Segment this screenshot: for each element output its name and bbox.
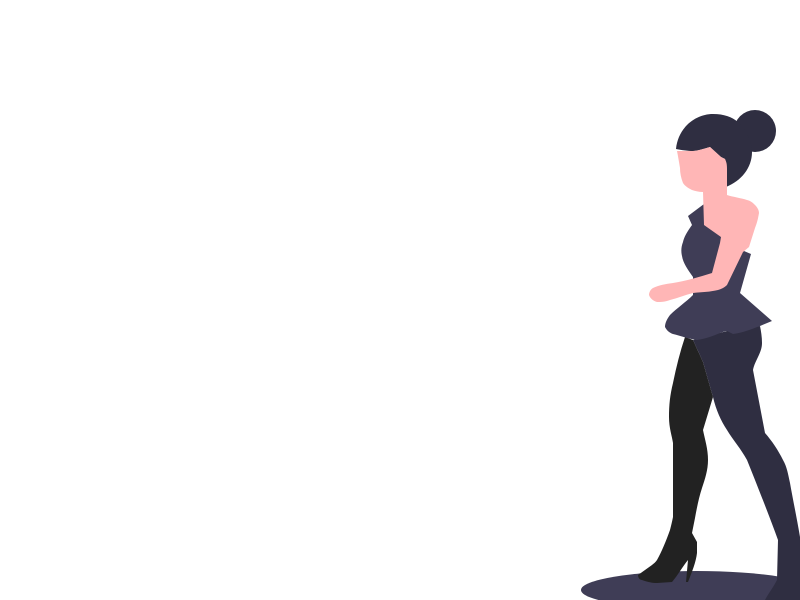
top and peplum: [665, 204, 772, 340]
skin: face, neck and arm: [649, 147, 759, 302]
hair and bun: [676, 110, 776, 187]
back leg: [638, 337, 713, 583]
front leg: [693, 326, 800, 600]
ground shadow: [581, 571, 800, 600]
